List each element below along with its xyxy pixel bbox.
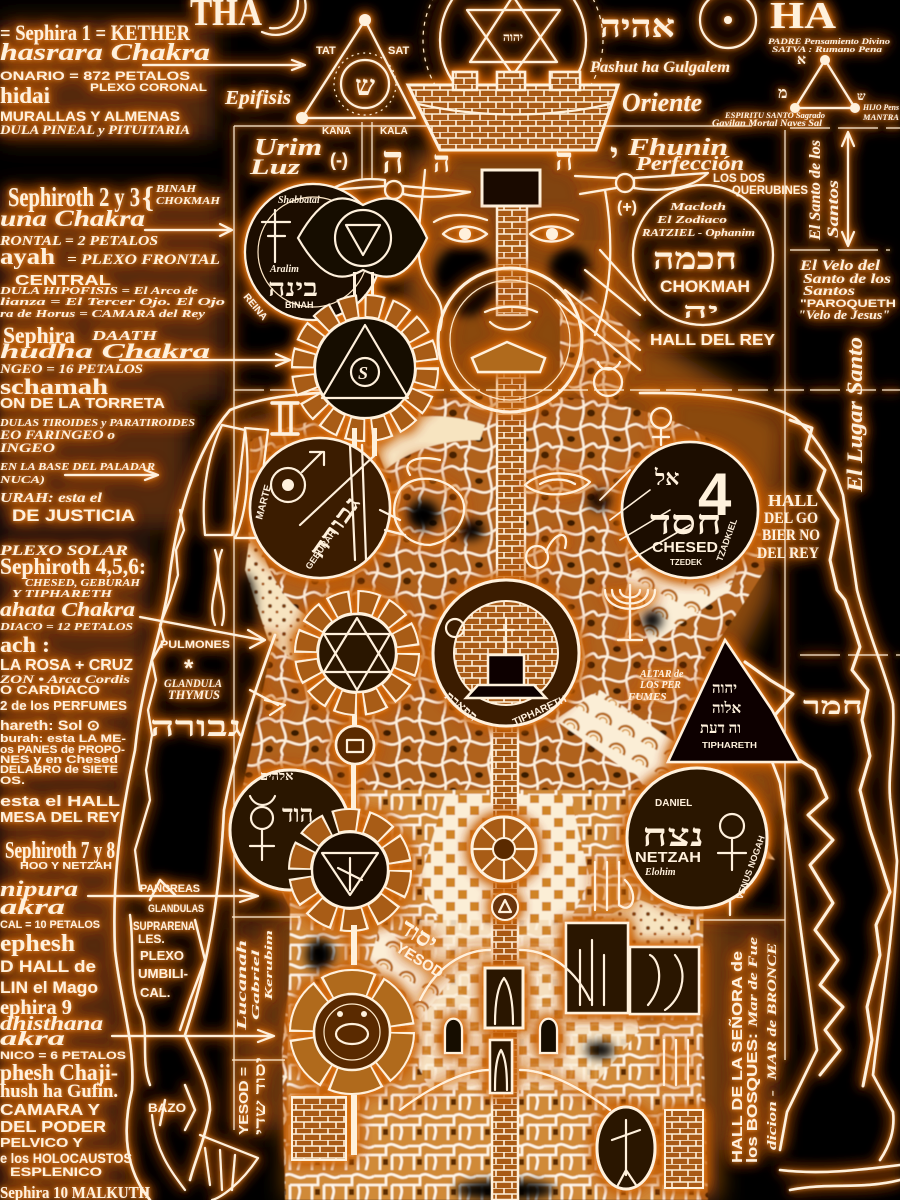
Pashut: Pashut ha Gulgalem bbox=[589, 59, 730, 76]
Sephiroth 2 y 3 block: = PLEXO FRONTAL bbox=[67, 252, 220, 268]
Kana Kala: ה bbox=[433, 146, 450, 179]
lower scenes bbox=[292, 915, 703, 1189]
eyes bbox=[434, 215, 578, 242]
Sephira 1 block: PLEXO CORONAL bbox=[90, 82, 207, 94]
rotated labels: יסוד שדי bbox=[253, 1057, 269, 1135]
Sephiroth 4,5,6 block: DIACO = 12 PETALOS bbox=[0, 621, 133, 633]
panel: Binah circle: REINA bbox=[241, 292, 269, 323]
Sephiroth 7 y 8 block: D HALL de bbox=[0, 957, 96, 976]
panel: Binah circle: BINAH bbox=[285, 300, 314, 310]
triangle right: מ bbox=[778, 85, 787, 102]
Sephira 1 block: DULA PINEAL y PITUITARIA bbox=[0, 122, 190, 137]
panel: Chesed circle: 4 bbox=[698, 461, 732, 528]
rotated labels: Gabriel bbox=[250, 948, 262, 1020]
panel: Svadhisthana lotus bbox=[302, 982, 402, 1155]
panel: Binah circle: בינה bbox=[268, 276, 318, 302]
small text right top: PADRE Pensamiento Divino bbox=[768, 37, 890, 46]
Daath block: ON DE LA TORRETA bbox=[0, 395, 165, 412]
veil text bbox=[798, 258, 896, 322]
Sephiroth 4,5,6 block: OS. bbox=[0, 775, 25, 787]
veil text: El Velo del bbox=[799, 258, 881, 274]
lower scenes: יסוד bbox=[396, 915, 441, 957]
panel: throat circle bbox=[438, 268, 582, 412]
central brick column bbox=[482, 170, 540, 1200]
Sephiroth 2 y 3 block: lianza = El Tercer Ojo. El Ojo bbox=[0, 297, 225, 308]
Kana Kala: ה bbox=[382, 140, 404, 182]
cherubim text bbox=[713, 171, 808, 197]
body outline bbox=[114, 392, 900, 1200]
Hall del gobierno: BIER NO bbox=[762, 527, 820, 544]
panel: Tiphareth circle: TIPHARETH bbox=[511, 694, 568, 728]
Sephiroth 7 y 8 block: ephesh bbox=[0, 931, 75, 957]
Sephira 1 block bbox=[0, 20, 210, 137]
gemini figures bbox=[204, 403, 298, 625]
Sephiroth 4,5,6 block: Y TIPHARETH bbox=[12, 588, 113, 600]
Sephiroth 4,5,6 block: Sephiroth 4,5,6: bbox=[0, 554, 146, 579]
panel: Chesed circle: אל bbox=[654, 465, 679, 490]
pancreas labels bbox=[133, 883, 204, 1000]
Fhunin bbox=[555, 135, 744, 177]
Sephiroth 4,5,6 block: hareth: Sol ⊙ bbox=[0, 717, 100, 733]
Daath block: Sephira bbox=[3, 323, 75, 348]
Sephiroth 4,5,6 block: DELABRO de SIETE bbox=[0, 764, 118, 776]
altar triangle: ALTAR de bbox=[639, 669, 684, 680]
menorah bbox=[605, 585, 655, 640]
Sephiroth 7 y 8 block: e los HOLOCAUSTOS bbox=[0, 1150, 132, 1166]
Daath block: NGEO = 16 PETALOS bbox=[0, 361, 143, 376]
thymus label: GLANDULA bbox=[164, 676, 222, 690]
star: * bbox=[184, 655, 194, 682]
cherub wings right: (+) bbox=[617, 199, 637, 216]
Santo rotated bbox=[807, 140, 842, 241]
hebrew Chesed: חמר bbox=[803, 694, 863, 720]
Sephiroth 7 y 8 block: Sephiroth 7 y 8 bbox=[5, 838, 115, 864]
veil text: Santo de los bbox=[803, 272, 892, 287]
Sephiroth 7 y 8 block: phesh Chaji- bbox=[0, 1060, 118, 1085]
rotated labels: Lucanah bbox=[235, 940, 250, 1032]
jaw lines bbox=[418, 170, 610, 335]
dark voids in the torso bbox=[140, 244, 874, 1200]
caption: ESPIRITU SANTO Sagrado bbox=[724, 111, 825, 120]
small text right top: SATVA : Rumano Pena bbox=[772, 45, 882, 54]
icon: crescent bbox=[262, 0, 306, 35]
Sephiroth 7 y 8 block: NICO = 6 PETALOS bbox=[0, 1050, 126, 1062]
Sephira 1 block: ONARIO = 872 PETALOS bbox=[0, 69, 190, 83]
altar triangle: וה דעת bbox=[700, 721, 741, 737]
rotated hall text bbox=[728, 937, 779, 1163]
Sephiroth 7 y 8 block: DEL PODER bbox=[0, 1119, 106, 1136]
Sephiroth 2 y 3 block: CENTRAL bbox=[15, 272, 111, 289]
Sephiroth 4,5,6 block: ach : bbox=[0, 632, 50, 657]
pancreas labels: PLEXO bbox=[140, 948, 184, 963]
panel: Chokmah circle bbox=[633, 185, 773, 325]
rotated hall text: HALL DE LA SEÑORA de bbox=[728, 951, 746, 1163]
Hall del gobierno: DEL REY bbox=[757, 545, 819, 562]
textured body fills bbox=[240, 170, 775, 1200]
altar triangle: TIPHARETH bbox=[702, 741, 757, 750]
panel: Netzah circle: NETZAH bbox=[635, 849, 701, 866]
Sephiroth 4,5,6 block: esta el HALL bbox=[0, 793, 120, 810]
Urim Luz: Luz bbox=[249, 154, 301, 179]
Sephiroth 2 y 3 block: RONTAL = 2 PETALOS bbox=[0, 234, 158, 249]
triangle right bbox=[778, 53, 866, 113]
panel: Geburah circle: MARTE bbox=[254, 483, 274, 521]
wheel bbox=[472, 817, 536, 920]
panel: Chokmah circle: יה bbox=[683, 298, 719, 323]
Fhunin: Perfección bbox=[635, 153, 744, 175]
panel: Daath lotus bbox=[303, 306, 427, 456]
panel: Netzah circle: נצח bbox=[642, 817, 704, 853]
Hall del gobierno bbox=[757, 491, 820, 562]
panel: Chokmah circle: CHOKMAH bbox=[660, 277, 750, 296]
Fhunin: י bbox=[610, 136, 618, 172]
Urim Luz: Urim bbox=[254, 135, 322, 161]
Daath block: EO FARINGEO o bbox=[0, 427, 116, 442]
pancreas labels: GLANDULAS bbox=[148, 903, 204, 915]
triangle right: ש bbox=[857, 89, 866, 103]
Fhunin: ה bbox=[555, 141, 573, 177]
Sephiroth 4,5,6 block: 2 de los PERFUMES bbox=[0, 698, 127, 713]
panel: Chesed circle: חסד bbox=[650, 505, 722, 542]
veil text: "Velo de Jesus" bbox=[798, 307, 890, 322]
altar triangle: אלוה bbox=[712, 700, 741, 717]
veil text: "PAROQUETH bbox=[800, 298, 896, 310]
Kana Kala: KANA bbox=[322, 126, 351, 137]
Daath block: INGEO bbox=[0, 440, 56, 455]
panel: Hod circle: הוד bbox=[282, 802, 314, 828]
icons: planets bbox=[526, 362, 688, 1085]
Sephiroth 7 y 8 block bbox=[0, 838, 150, 1200]
panel: Chesed circle: CHESED bbox=[652, 539, 718, 556]
Sephiroth 2 y 3 block: Sephiroth 2 y 3 bbox=[8, 182, 140, 212]
Epifisis: Epifisis bbox=[224, 87, 291, 109]
panel: Hod circle: אלהים bbox=[260, 768, 293, 783]
Sephira 1 block: = Sephira 1 = KETHER bbox=[0, 20, 191, 45]
Sephiroth 2 y 3 block: BINAH bbox=[155, 183, 196, 195]
Sephiroth 7 y 8 block: akra bbox=[0, 894, 65, 919]
panel: Netzah circle bbox=[627, 768, 767, 908]
Sephira 1 block: MURALLAS Y ALMENAS bbox=[0, 108, 180, 124]
panel: Netzah circle: Elohim bbox=[644, 867, 676, 878]
cherubim text: LOS DOS bbox=[713, 171, 765, 185]
panel: Daath lotus: S bbox=[358, 363, 368, 383]
panel: Ajna eye chakra bbox=[298, 198, 427, 307]
spleen: BAZO bbox=[148, 1101, 186, 1115]
Sephiroth 4,5,6 block: ZON • Arca Cordis bbox=[0, 672, 130, 686]
panel: Tiphareth circle bbox=[433, 580, 579, 728]
Oriente: Oriente bbox=[622, 88, 702, 117]
Sephiroth 2 y 3 block: una Chakra bbox=[0, 206, 145, 231]
hebrew Geburah: גבורה bbox=[150, 712, 242, 743]
Sephiroth 7 y 8 block: dhisthana bbox=[0, 1013, 103, 1035]
Daath block: EN LA BASE DEL PALADAR bbox=[0, 461, 155, 473]
Sephiroth 7 y 8 block: akra bbox=[0, 1028, 65, 1050]
Sephiroth 4,5,6 block: ahata Chakra bbox=[0, 599, 135, 621]
lungs label: PULMONES bbox=[160, 639, 230, 651]
panel: Chokmah circle: חכמה bbox=[653, 243, 737, 276]
Sephiroth 4,5,6 block: MESA DEL REY bbox=[0, 809, 120, 826]
pancreas labels: UMBILI- bbox=[138, 966, 188, 981]
Sephira 1 block: hasrara Chakra bbox=[0, 40, 210, 66]
panel: Hod circle bbox=[230, 768, 350, 890]
Sephiroth 2 y 3 block: DULA HIPOFISIS = El Arco de bbox=[0, 286, 199, 297]
thymus label: THYMUS bbox=[168, 687, 220, 702]
Sephiroth 2 y 3 block: { bbox=[142, 181, 154, 214]
right column labels bbox=[757, 140, 896, 720]
left column text bbox=[0, 20, 225, 1200]
caption: MANTRA bbox=[862, 113, 900, 122]
top header bbox=[190, 0, 900, 150]
rotated labels: Kerubim bbox=[263, 929, 275, 1002]
panel: Chesed circle: TZADKIEL bbox=[714, 517, 739, 563]
panel: Chokmah circle: Macloth bbox=[669, 201, 726, 213]
panel: Chesed circle bbox=[622, 442, 758, 578]
Sephiroth 4,5,6 block: LA ROSA + CRUZ bbox=[0, 657, 133, 674]
cherub wings right bbox=[575, 173, 708, 216]
foot bbox=[152, 1115, 258, 1200]
Hall del gobierno: HALL bbox=[768, 491, 818, 510]
lower scenes: YESOD bbox=[393, 939, 446, 982]
triangle left: TAT bbox=[316, 45, 336, 57]
Hall del Rey: HALL DEL REY bbox=[650, 332, 775, 349]
rotated labels: YESOD = bbox=[236, 1067, 251, 1135]
Sephiroth 4,5,6 block bbox=[0, 543, 146, 826]
Daath block: schamah bbox=[0, 374, 108, 399]
Urim Luz bbox=[249, 135, 322, 179]
Daath block: URAH: esta el bbox=[0, 491, 102, 506]
star circle: יהוה bbox=[503, 30, 523, 44]
cherubim text: QUERUBINES bbox=[732, 183, 808, 197]
Sephiroth 7 y 8 block: hush ha Gufin. bbox=[0, 1081, 118, 1102]
Daath block: DULAS TIROIDES y PARATIROIDES bbox=[0, 417, 195, 429]
caption bbox=[712, 103, 900, 128]
triangle left: ש bbox=[355, 71, 375, 102]
Sephiroth 7 y 8 block: ESPLENICO bbox=[10, 1165, 102, 1179]
triangle left: SAT bbox=[388, 45, 409, 57]
Kana Kala: (-) bbox=[330, 150, 348, 170]
panel: Geburah circle bbox=[250, 438, 390, 578]
panel: Manipura lotus bbox=[300, 820, 400, 965]
star circle bbox=[423, 0, 603, 130]
rotated labels bbox=[235, 929, 275, 1135]
panel: Chokmah circle: El Zodiaco bbox=[656, 214, 728, 226]
crown tower bbox=[408, 72, 618, 150]
panel: Chesed circle: TZEDEK bbox=[670, 558, 702, 567]
veil text: Santos bbox=[803, 284, 856, 299]
small text right top bbox=[768, 37, 890, 54]
pancreas labels: CAL. bbox=[140, 985, 170, 1000]
Daath block: DAATH bbox=[91, 329, 159, 344]
Sephiroth 7 y 8 block: CAL = 10 PETALOS bbox=[0, 919, 100, 931]
crab and fish shapes bbox=[380, 458, 690, 560]
stair lines bbox=[556, 250, 645, 370]
rotated hall text: dicion - bbox=[764, 1090, 779, 1150]
pancreas labels: PANCREAS bbox=[140, 883, 200, 895]
panel: Chokmah circle: RATZIEL - Ophanim bbox=[641, 228, 755, 239]
Sephiroth 7 y 8 block: nipura bbox=[0, 876, 78, 901]
Daath block: hudha Chakra bbox=[0, 339, 210, 363]
altar triangle bbox=[627, 640, 800, 762]
rotated hall text: MAR de BRONCE bbox=[764, 943, 779, 1081]
Fhunin: Fhunin bbox=[627, 135, 728, 161]
head bbox=[249, 122, 808, 370]
panel: Binah circle: Aralim bbox=[269, 264, 299, 275]
Sephiroth 4,5,6 block: CHESED, GEBURAH bbox=[25, 577, 140, 589]
rotated hall text: los BOSQUES: bbox=[744, 1033, 761, 1163]
Sephiroth 2 y 3 block: ayah bbox=[0, 244, 55, 269]
triangle right: א bbox=[797, 53, 806, 68]
Sephiroth 7 y 8 block: LIN el Mago bbox=[0, 978, 98, 997]
Daath block: DE JUSTICIA bbox=[12, 506, 135, 525]
altar triangle: FUMES bbox=[627, 691, 667, 703]
caption: Gavilan Mortal Naves Sal bbox=[712, 118, 823, 128]
panel: Binah circle: Shabbatai bbox=[278, 195, 320, 206]
panel: Binah circle bbox=[241, 184, 381, 323]
Kana Kala bbox=[322, 122, 450, 182]
panel: Netzah circle: VENUS NOGAH bbox=[734, 834, 767, 901]
Sephiroth 7 y 8 block: CAMARA Y bbox=[0, 1102, 100, 1119]
Santo rotated: El Santo de los bbox=[807, 140, 824, 241]
altar triangle: יהוה bbox=[712, 681, 737, 697]
pancreas labels: LES. bbox=[138, 932, 165, 946]
panel: Geburah circle: GEBURAH bbox=[303, 528, 338, 571]
rotated hall text: Mar de Fue bbox=[745, 937, 760, 1028]
panel: Geburah circle: גבורה bbox=[304, 491, 365, 563]
hebrew: Ehieh: אהיה bbox=[600, 8, 675, 44]
Sephiroth 2 y 3 block bbox=[0, 181, 225, 320]
Sephiroth 2 y 3 block: ra de Horus = CAMARA del Rey bbox=[0, 309, 206, 320]
Sephiroth 7 y 8 block: ephira 9 bbox=[0, 995, 72, 1019]
Sephiroth 2 y 3 block: CHOKMAH bbox=[156, 195, 220, 207]
Sephiroth 4,5,6 block: O CARDIACO bbox=[0, 683, 100, 697]
Daath block: NUCA) bbox=[0, 474, 45, 486]
Sephiroth 4,5,6 block: burah: esta LA ME- bbox=[0, 733, 126, 745]
Lugar Santo: El Lugar Santo bbox=[842, 337, 867, 493]
Sephira 1 block: hidai bbox=[0, 83, 51, 108]
Sephiroth 4,5,6 block: NES y en Chesed bbox=[0, 754, 118, 766]
Kana Kala: KALA bbox=[380, 126, 408, 137]
panel: Netzah circle: DANIEL bbox=[655, 798, 692, 809]
Hall del gobierno: DEL GO bbox=[764, 510, 818, 527]
Daath block bbox=[0, 323, 210, 525]
thymus label bbox=[164, 676, 222, 702]
altar triangle: LOS PER bbox=[639, 680, 681, 691]
triangle left bbox=[296, 14, 415, 124]
caption: HIJO Pens bbox=[862, 103, 899, 112]
Sephiroth 7 y 8 block: HOO Y NETZAH bbox=[20, 861, 112, 872]
Santo rotated: Santos bbox=[825, 180, 842, 238]
Sephiroth 7 y 8 block: PELVICO Y bbox=[0, 1135, 83, 1150]
icon: sun circle bbox=[700, 0, 756, 48]
Sephiroth 4,5,6 block: PLEXO SOLAR bbox=[0, 543, 128, 559]
pancreas labels: SUPRARENA bbox=[133, 919, 195, 933]
panel: Tiphareth circle: תפארת bbox=[442, 688, 481, 724]
left organ labels bbox=[133, 639, 275, 1200]
panel: heart lotus bbox=[306, 602, 408, 810]
Sephiroth 4,5,6 block: os PANES de PROPO- bbox=[0, 744, 125, 756]
cherub wings left bbox=[330, 179, 470, 199]
